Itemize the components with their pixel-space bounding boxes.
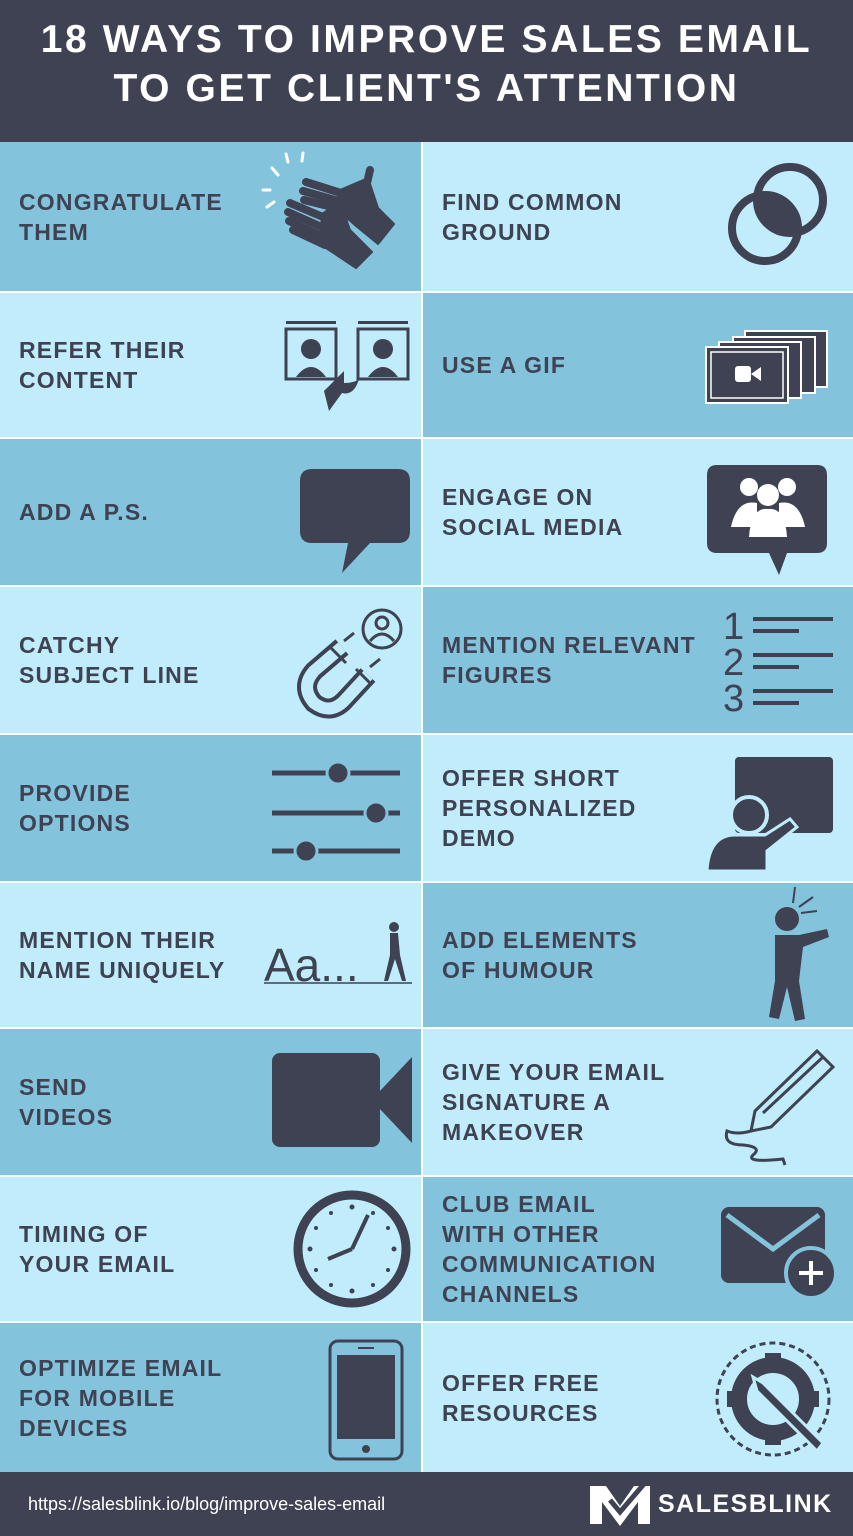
text: catchy subject line (19, 632, 200, 688)
text: refer their content: CONTENT (19, 367, 139, 393)
icon: profile frames with arrow (284, 321, 410, 411)
panel: find common ground (423, 142, 853, 291)
icon: person laughing pointing (769, 886, 829, 1021)
text: give your email signature a makeover: MAKEOVER (442, 1119, 585, 1145)
text: offer free resources (442, 1370, 600, 1426)
text: mention relevant figures: MENTION RELEVANT (442, 632, 696, 658)
text: offer short personalized demo (442, 765, 637, 851)
text: mention their name uniquely: MENTION THEIR (19, 927, 216, 953)
text: add a p.s.: ADD A P.S. (19, 499, 149, 525)
text: offer free resources: RESOURCES (442, 1400, 598, 1426)
text: catchy subject line: CATCHY (19, 632, 120, 658)
text: url: https://salesblink.io/blog/improve-sales-email (28, 1494, 385, 1514)
icon: numbered list (723, 606, 833, 713)
icon: clock (294, 1190, 410, 1308)
text: send videos (19, 1074, 113, 1130)
text: send videos: SEND (19, 1074, 88, 1100)
icon: magnet attracting person (297, 608, 402, 718)
text: optimize email for mobile devices: OPTIMIZE EMAIL (19, 1354, 222, 1380)
panel: refer their content (0, 293, 421, 437)
text: add elements of humour (442, 927, 638, 983)
icon: overlapping circles (728, 163, 827, 265)
text: find common ground: FIND COMMON (442, 188, 623, 214)
text: club email with other communication channels: CHANNELS (442, 1281, 579, 1307)
text: use a gif: USE A GIF (442, 352, 566, 378)
icon: smartphone (328, 1340, 404, 1460)
panel: catchy subject line (0, 587, 421, 733)
text: provide options: PROVIDE (19, 780, 131, 806)
panel: congratulate them (0, 142, 421, 291)
icon: clapping hands (262, 152, 395, 269)
text: give your email signature a makeover: GIVE YOUR EMAIL (442, 1059, 665, 1085)
text: offer free resources: OFFER FREE (442, 1370, 600, 1396)
text: mention their name uniquely (19, 927, 225, 983)
logo: salesblink: SALESBLINK (658, 1490, 833, 1518)
icon: pen with signature (724, 1049, 835, 1166)
panel: use a gif (423, 293, 853, 437)
text: timing of your email (19, 1221, 175, 1277)
text: send videos: VIDEOS (19, 1104, 113, 1130)
panel: offer short personalized demo (423, 735, 853, 881)
footer (0, 1472, 853, 1536)
text: mention relevant figures: FIGURES (442, 662, 553, 688)
text: club email with other communication channels: COMMUNICATION (442, 1251, 656, 1277)
text: club email with other communication channels: CLUB EMAIL (442, 1191, 596, 1217)
title (0, 0, 853, 142)
panel: offer free resources (423, 1323, 853, 1472)
icon: sliders (272, 764, 400, 860)
panel: add elements of humour (423, 883, 853, 1027)
text: refer their content: REFER THEIR (19, 337, 186, 363)
icon: gear with pencil (716, 1342, 830, 1456)
text: club email with other communication channels: WITH OTHER (442, 1221, 600, 1247)
text: timing of your email: YOUR EMAIL (19, 1251, 175, 1277)
panel: add a p.s. (0, 439, 421, 585)
text: congratulate them (19, 188, 223, 244)
text: timing of your email: TIMING OF (19, 1221, 149, 1247)
text: offer short personalized demo: DEMO (442, 825, 516, 851)
text: engage on social media: ENGAGE ON (442, 484, 593, 510)
text: give your email signature a makeover (442, 1059, 665, 1145)
panel: mention their name uniquely (0, 883, 421, 1027)
panel: mention relevant figures (423, 587, 853, 733)
panel: send videos (0, 1029, 421, 1175)
icon: video camera (272, 1053, 412, 1147)
title: 18 WAYS TO IMPROVE SALES EMAIL (41, 18, 812, 61)
panel: provide options (0, 735, 421, 881)
text: optimize email for mobile devices: DEVICES (19, 1414, 128, 1440)
text: give your email signature a makeover: SIGNATURE A (442, 1089, 611, 1115)
text: find common ground (442, 188, 623, 244)
text: offer short personalized demo: OFFER SHORT (442, 765, 620, 791)
text: provide options (19, 780, 131, 836)
text: catchy subject line: SUBJECT LINE (19, 662, 200, 688)
text: optimize email for mobile devices (19, 1354, 222, 1440)
icon: group chat bubble (707, 465, 827, 575)
text: mention relevant figures (442, 632, 696, 688)
panel: optimize email for mobile devices (0, 1323, 421, 1472)
panel: give your email signature a makeover (423, 1029, 853, 1175)
icon: numbered list: 1 (723, 606, 744, 648)
icon: presenter at board (708, 757, 833, 870)
text: optimize email for mobile devices: FOR MOBILE (19, 1384, 175, 1410)
panel: club email with other communication channels (423, 1177, 853, 1321)
text: provide options: OPTIONS (19, 810, 131, 836)
panel: timing of your email (0, 1177, 421, 1321)
text: club email with other communication channels (442, 1191, 656, 1307)
icon: stacked video frames (705, 330, 828, 404)
text: refer their content (19, 337, 186, 393)
icon: Aa text with walking figure (264, 922, 412, 985)
icon: numbered list: 2 (723, 642, 744, 684)
text: congratulate them: THEM (19, 218, 89, 244)
text: mention their name uniquely: NAME UNIQUELY (19, 957, 225, 983)
title: TO GET CLIENT'S ATTENTION (113, 67, 740, 110)
icon: envelope with plus (721, 1207, 834, 1296)
text: add elements of humour: OF HUMOUR (442, 957, 595, 983)
text: find common ground: GROUND (442, 218, 551, 244)
text: offer short personalized demo: PERSONALIZED (442, 795, 637, 821)
text: add elements of humour: ADD ELEMENTS (442, 927, 638, 953)
text: engage on social media (442, 484, 623, 540)
text: congratulate them: CONGRATULATE (19, 188, 223, 214)
logo: salesblink (590, 1486, 833, 1526)
panel: engage on social media (423, 439, 853, 585)
icon: speech bubble (300, 469, 410, 573)
text: engage on social media: SOCIAL MEDIA (442, 514, 623, 540)
